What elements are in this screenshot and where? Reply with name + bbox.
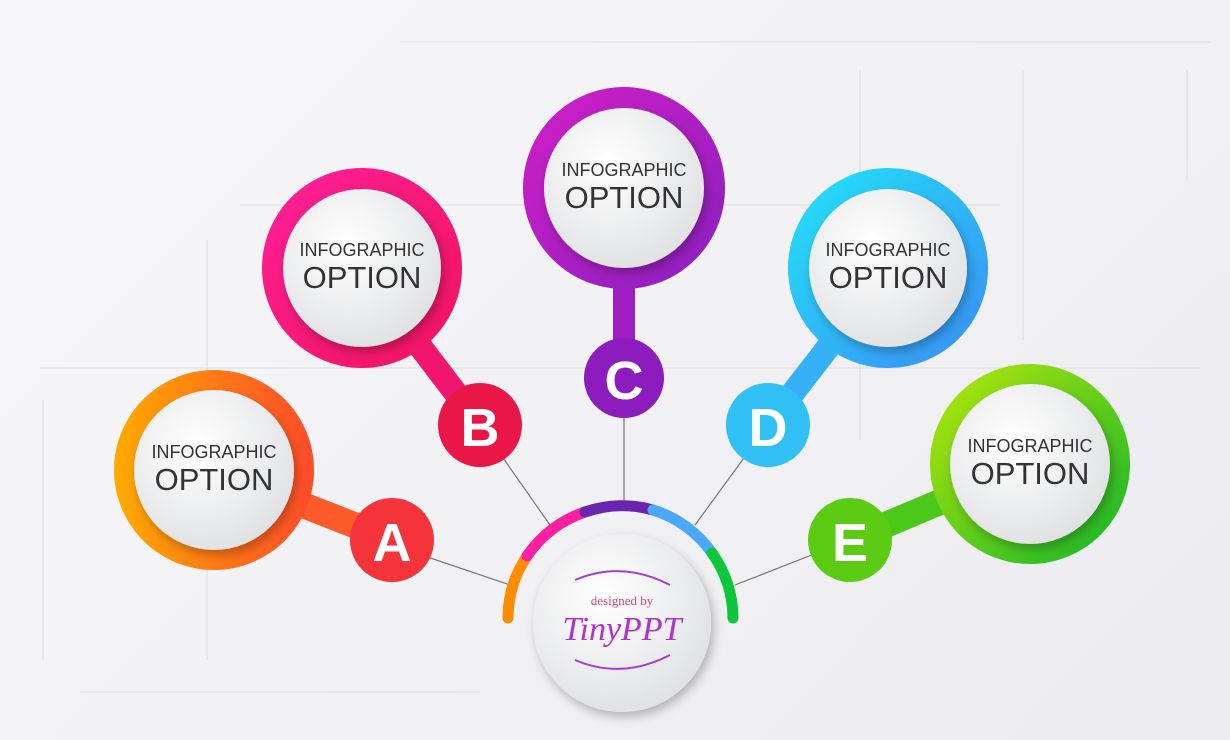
drop C: C: [604, 351, 644, 411]
option E: INFOGRAPHIC: [967, 436, 1093, 456]
drop E: E: [832, 513, 868, 573]
option A: [114, 370, 434, 582]
drop A: A: [372, 513, 412, 573]
option E: OPTION: [971, 456, 1089, 491]
option B: OPTION: [303, 260, 421, 295]
option C: OPTION: [565, 180, 683, 215]
option E: [808, 364, 1130, 582]
drop B: B: [460, 398, 500, 458]
center arc: [508, 506, 733, 618]
connector lines: [392, 380, 850, 585]
option A: OPTION: [155, 462, 273, 497]
drop D: D: [748, 398, 788, 458]
option B: INFOGRAPHIC: [299, 240, 425, 260]
drop D: [726, 383, 810, 467]
option C: INFOGRAPHIC: [561, 160, 687, 180]
option C: [523, 87, 725, 418]
drop C: [584, 338, 664, 418]
drop E: [808, 498, 892, 582]
center logo: [533, 534, 711, 712]
drop A: [350, 498, 434, 582]
option D: OPTION: [829, 260, 947, 295]
center logo: designed by: [591, 593, 654, 608]
option D: INFOGRAPHIC: [825, 240, 951, 260]
option B: [262, 168, 522, 467]
option A: INFOGRAPHIC: [151, 442, 277, 462]
drop B: [438, 383, 522, 467]
center logo: TinyPPT: [562, 611, 684, 648]
option D: [726, 168, 988, 467]
